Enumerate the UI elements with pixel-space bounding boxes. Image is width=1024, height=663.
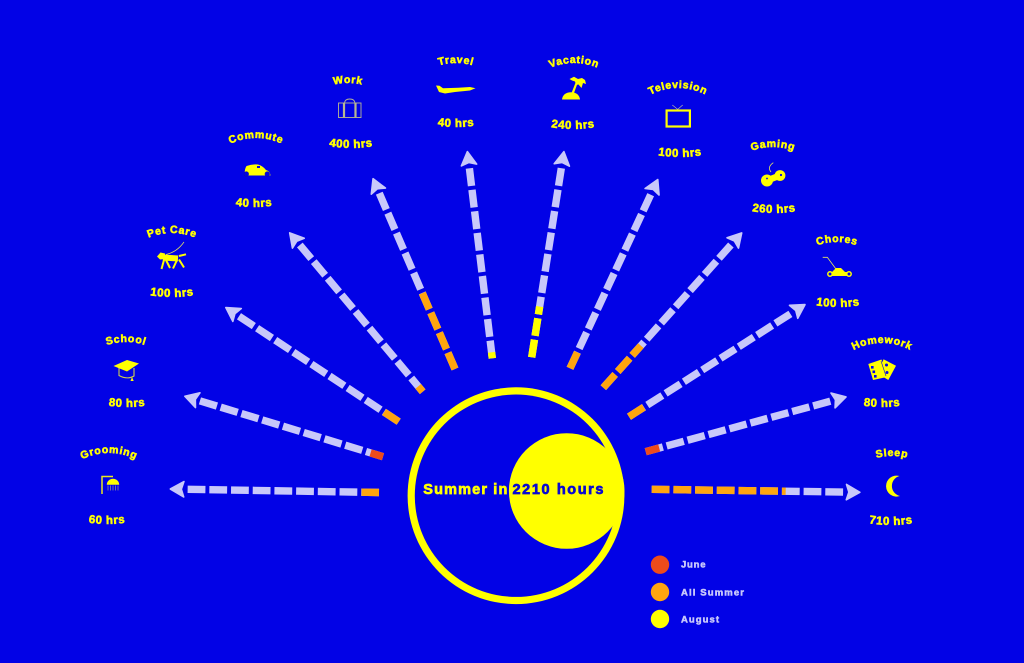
- label: Work: [329, 76, 372, 148]
- label: Chores: Chores: [816, 234, 857, 245]
- arrow: Vacation: [524, 150, 572, 358]
- label: Commute: 40 hrs: [236, 198, 272, 208]
- label: Travel: [436, 56, 476, 128]
- label: Work: Work: [332, 76, 364, 85]
- icon: suitcase: [338, 99, 361, 118]
- label: Television: [647, 80, 706, 158]
- icon: books: [868, 359, 896, 380]
- label: Sleep: Sleep: [876, 448, 908, 460]
- label: Gaming: [750, 139, 795, 214]
- arrow: Grooming: [170, 481, 379, 500]
- label: Sleep: [870, 448, 912, 526]
- icon: shower: [102, 476, 119, 494]
- icon: airplane: [436, 86, 476, 94]
- label: Travel: 40 hrs: [438, 118, 474, 128]
- arrow: Travel: [460, 151, 500, 359]
- label: Homework: 80 hrs: [864, 398, 900, 408]
- icon: lawn mower: [823, 257, 851, 276]
- label: Grooming: Grooming: [80, 446, 138, 460]
- legend item: June: June: [681, 560, 706, 571]
- icon: game controller: [761, 163, 785, 186]
- icon: graduation cap: [114, 360, 139, 381]
- legend item: August: August: [681, 615, 720, 626]
- icon: palm island: [562, 77, 586, 100]
- label: School: 80 hrs: [108, 398, 145, 408]
- label: Pet Care: [146, 225, 196, 298]
- arrow: School: [183, 389, 385, 464]
- central sun and ring: [408, 387, 624, 604]
- label: Homework: Homework: [850, 337, 913, 350]
- title: Summer in 2210 hours: Summer in: [423, 482, 507, 498]
- label: Television: 100 hrs: [658, 148, 701, 158]
- icon: dog on leash: [157, 242, 186, 269]
- arrow: Gaming: [598, 228, 747, 393]
- label: Vacation: Vacation: [547, 56, 598, 68]
- arrow: Work: [366, 176, 462, 372]
- label: Commute: [228, 132, 283, 208]
- label: Vacation: [547, 56, 598, 130]
- label: School: [106, 334, 146, 408]
- title: Summer in 2210 hours: [423, 482, 604, 498]
- label: Commute: Commute: [228, 132, 283, 143]
- label: Chores: [816, 234, 859, 308]
- label: Sleep: 710 hrs: [870, 515, 912, 526]
- icon: car: [244, 164, 270, 176]
- arrow: Sleep: [652, 482, 860, 500]
- label: Grooming: [80, 446, 138, 524]
- icon: television: [667, 105, 690, 126]
- label: Gaming: Gaming: [750, 139, 795, 152]
- label: Travel: Travel: [437, 56, 474, 66]
- label: Work: 400 hrs: [329, 138, 372, 148]
- title: Summer in 2210 hours: 2210 hours: [512, 482, 604, 498]
- arrow: Pet Care: [222, 301, 403, 428]
- label: School: School: [106, 334, 146, 346]
- arrow: Commute: [284, 228, 429, 397]
- icon: crescent moon: [886, 476, 900, 497]
- label: Pet Care: Pet Care: [146, 225, 196, 238]
- label: Pet Care: 100 hrs: [150, 288, 193, 298]
- label: Vacation: 240 hrs: [551, 119, 594, 130]
- arrow: Television: [563, 176, 665, 372]
- legend: [651, 556, 745, 628]
- label: Gaming: 260 hrs: [752, 203, 795, 214]
- label: Homework: [850, 337, 913, 408]
- label: Television: Television: [647, 80, 706, 94]
- label: Chores: 100 hrs: [816, 298, 859, 308]
- legend item: All Summer: All Summer: [681, 588, 745, 598]
- arrow: Chores: [625, 298, 809, 423]
- arrow: Homework: [644, 389, 848, 459]
- label: Grooming: 60 hrs: [89, 514, 125, 524]
